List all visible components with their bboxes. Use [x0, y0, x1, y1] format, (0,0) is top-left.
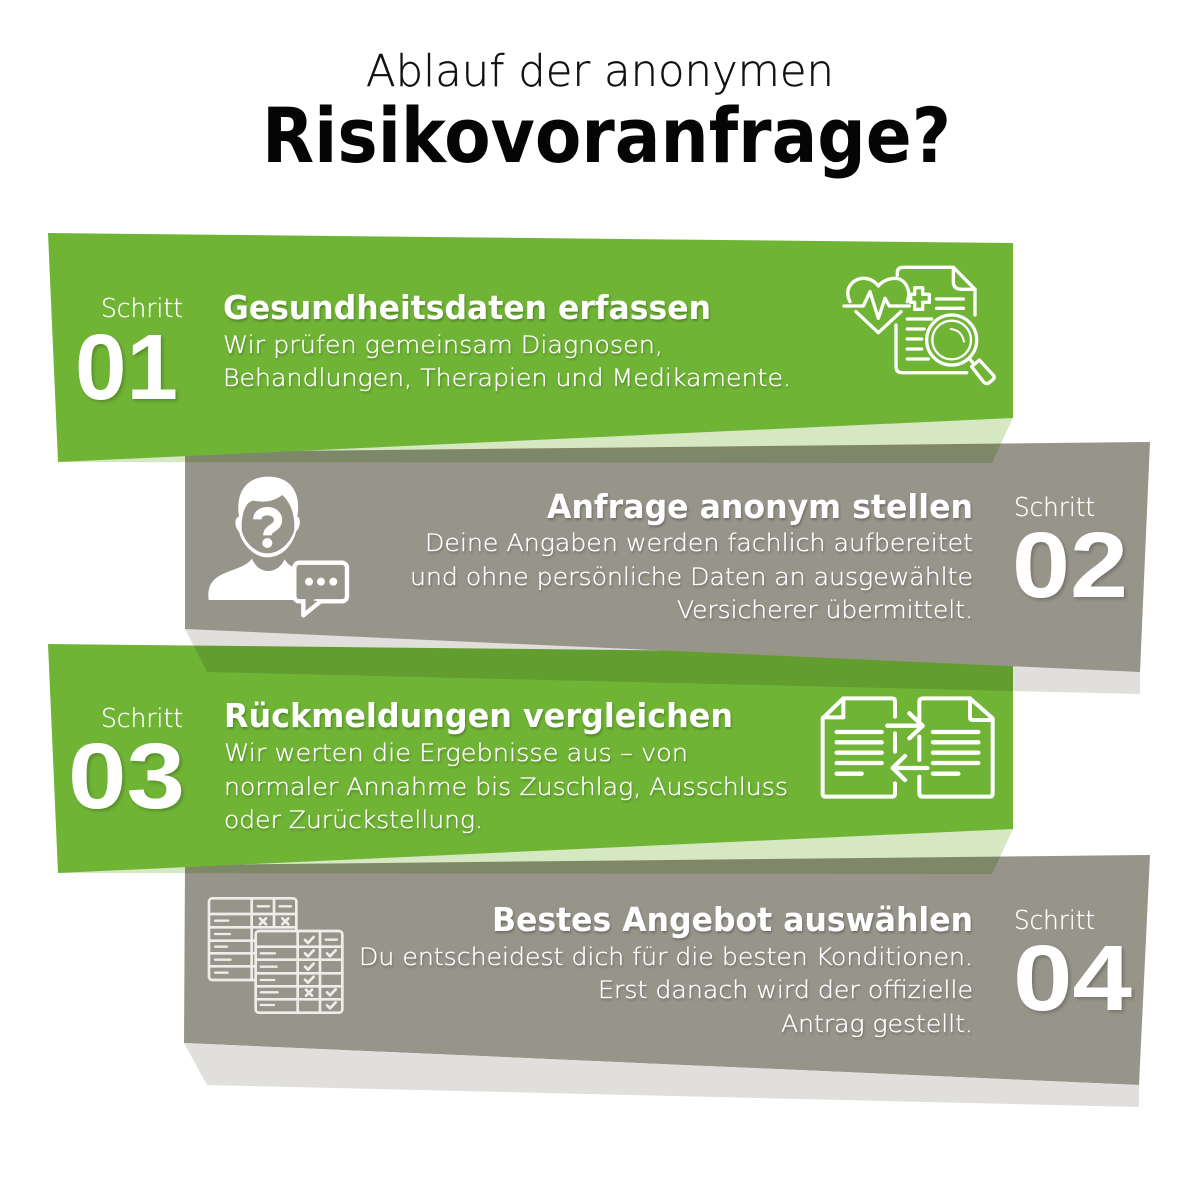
step 3 heading: Rückmeldungen vergleichen — [224, 696, 733, 735]
icon: comparison tables — [209, 898, 342, 1013]
step 2 description: Deine Angaben werden fachlich aufbereitet — [425, 529, 973, 557]
title line 1: Ablauf der anonymen — [366, 46, 834, 97]
step 2 description: und ohne persönliche Daten an ausgewählte — [410, 563, 973, 591]
title — [262, 46, 951, 180]
panel 2 background — [185, 442, 1150, 672]
step 3 description — [224, 739, 788, 834]
step 1 description: Wir prüfen gemeinsam Diagnosen, — [223, 331, 663, 359]
step 3 description: Wir werten die Ergebnisse aus – von — [224, 739, 688, 767]
panel: step 1 — [48, 233, 1013, 463]
step 1 label: Schritt — [101, 294, 183, 324]
icon: anonymous person with speech bubble — [208, 477, 347, 615]
step 3 description: normaler Annahme bis Zuschlag, Ausschluss — [224, 773, 788, 801]
step 4 description — [359, 943, 973, 1038]
step 4 label: Schritt — [1014, 906, 1095, 936]
panel 2 shadow — [185, 629, 1140, 694]
step 3 label: Schritt — [101, 704, 183, 734]
step 4 heading: Bestes Angebot auswählen — [492, 900, 973, 939]
step 4 description: Antrag gestellt. — [781, 1010, 973, 1038]
step 1 number: 01 — [75, 315, 178, 419]
panel 3 background — [48, 644, 1013, 873]
title line 2: Risikovoranfrage? — [262, 91, 951, 180]
step 2 number: 02 — [1012, 513, 1128, 617]
panel: step 4 — [184, 855, 1150, 1107]
panel 1 shadow — [58, 418, 1013, 463]
icon: health record with magnifier — [844, 267, 994, 384]
step 3 description: oder Zurückstellung. — [224, 806, 483, 834]
step 1 heading: Gesundheitsdaten erfassen — [223, 288, 711, 327]
panel 1 background — [48, 233, 1013, 462]
step 3 number: 03 — [68, 724, 185, 828]
panel 4 shadow — [184, 1043, 1139, 1107]
step 1 description: Behandlungen, Therapien und Medikamente. — [223, 364, 791, 392]
step 2 heading: Anfrage anonym stellen — [547, 487, 973, 526]
step 4 description: Du entscheidest dich für die besten Konditionen. — [359, 943, 973, 971]
step 2 label: Schritt — [1014, 493, 1095, 523]
panel 3 shadow — [58, 829, 1013, 874]
step 4 description: Erst danach wird der offizielle — [598, 976, 973, 1004]
step 2 description — [410, 529, 973, 624]
icon: document exchange — [823, 698, 993, 797]
step 2 description: Versicherer übermittelt. — [677, 596, 973, 624]
panel: step 3 — [48, 644, 1013, 874]
panel: step 2 — [185, 442, 1150, 694]
panel 4 background — [184, 855, 1150, 1085]
step 1 description — [223, 331, 791, 392]
step 4 number: 04 — [1013, 926, 1132, 1030]
